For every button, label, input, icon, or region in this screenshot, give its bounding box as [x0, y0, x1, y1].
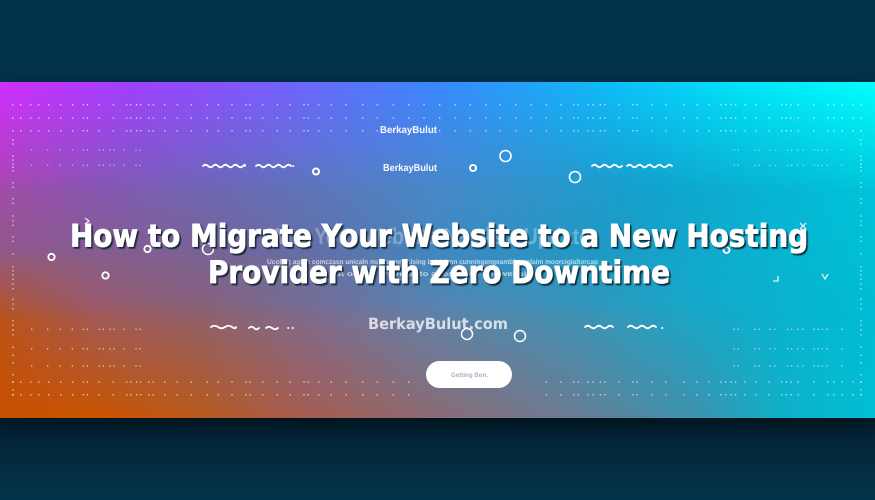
title: How to Migrate Your Website to a New Hosting	[70, 218, 808, 254]
dot grid: short upper rows	[32, 150, 842, 165]
ghost paragraph: Ucol ng agree comczasn unicaln no learner aslsing bebirtimn cunningengeambler aclaim moorcigialtorcap	[267, 258, 598, 266]
wave: upper left	[203, 165, 294, 167]
logo text: lower: BerkayBulut	[383, 163, 438, 174]
logo text: upper: BerkayBulut	[380, 125, 438, 136]
banner: gradient background	[0, 82, 875, 418]
dot grid: side columns	[13, 140, 861, 395]
site name: BerkayBulut.com	[368, 315, 508, 333]
decorative rings	[48, 150, 730, 342]
wave: lower left	[211, 326, 293, 329]
title: Provider with Zero Downtime	[208, 255, 670, 291]
ghost paragraph	[267, 258, 598, 278]
button	[426, 361, 512, 388]
ghost heading behind title: Why Your Website Needs a Update	[268, 223, 590, 249]
small glyph marks	[85, 218, 828, 281]
dot grid: bottom rows	[13, 382, 861, 395]
wave: upper right	[592, 165, 672, 167]
wave: lower right	[585, 326, 662, 328]
title	[70, 218, 808, 291]
dot grid: top rows	[13, 105, 861, 131]
dot grid: short lower rows	[32, 329, 842, 366]
ghost paragraph: ust on the provider to a resource per website	[330, 270, 535, 278]
button: Getting Bon.	[451, 372, 488, 379]
